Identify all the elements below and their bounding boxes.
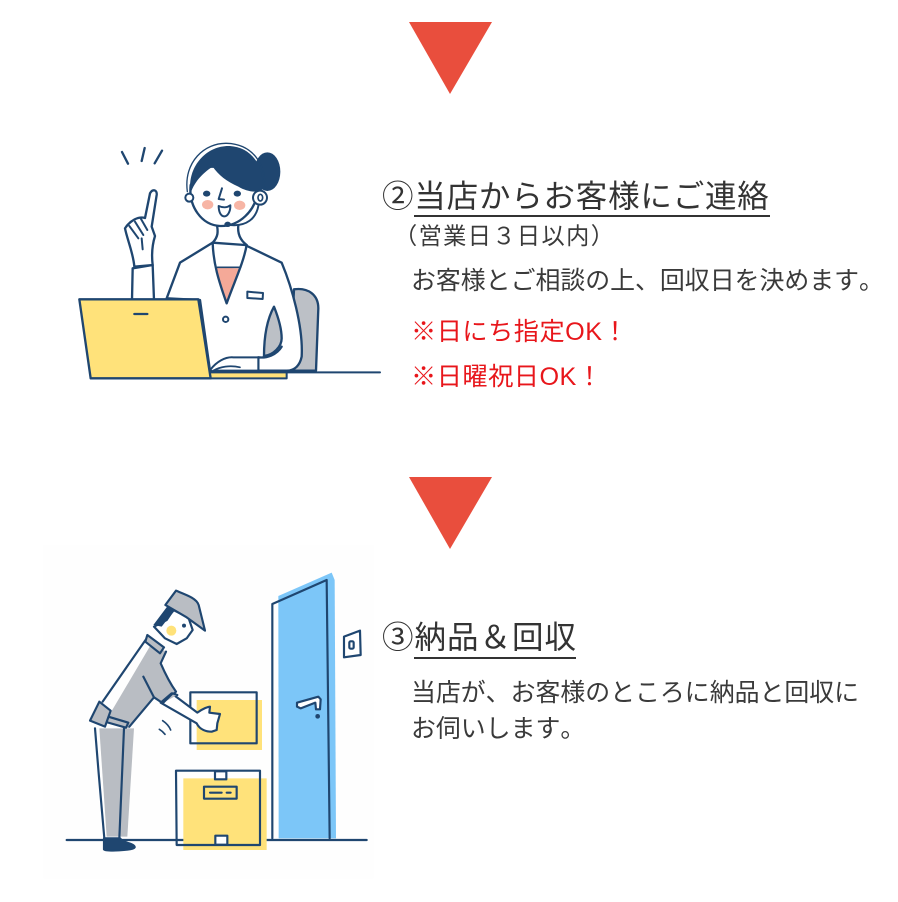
neck and inner shirt [216,267,240,303]
shoe [104,838,135,850]
shirt fill [108,643,176,728]
sleeve [132,265,154,300]
arm [161,693,220,732]
button [223,317,228,322]
text: step 2 description: お客様とご相談の上、回収日を決めます。 [411,267,884,295]
arrow: down triangle 2 [409,477,492,549]
hand on keyboard [211,357,258,371]
nose [219,188,224,200]
heading underline: step 3 [414,657,576,658]
text: step 3 description: お伺いします。 [411,715,585,743]
text: step 3 description: 当店が、お客様のところに納品と回収に [411,679,859,707]
faint backdrop [43,545,373,878]
text: step 3 description [411,679,859,743]
shirt outline [103,638,176,727]
heading underline: step 2 [414,215,770,216]
illustration: courier with boxes at door [43,545,373,878]
head [154,610,193,644]
lower box [183,778,267,850]
callout: Sundays and holidays OK: ※日曜祝日OK！ [411,363,603,391]
cheeks [202,200,213,209]
headset band [187,143,265,192]
sparkle lines [122,148,162,164]
upper box [197,700,262,750]
coat [167,243,302,371]
collar [145,635,164,653]
mic boom [230,206,258,225]
text: within 3 business days: （営業日３日以内） [394,223,615,249]
cap [165,591,205,631]
motion lines [159,721,171,734]
ear piece [253,191,267,205]
door colour [278,573,336,838]
cheek [166,626,176,636]
heading: step 3: ③納品＆回収 [382,619,577,655]
arm gap [264,307,282,356]
hand pointing [125,190,157,267]
mouth [219,205,230,216]
man trousers [99,728,134,837]
bun [254,152,280,191]
badge [247,292,263,299]
eyes [203,191,210,197]
door outline [272,580,330,838]
arrow: down triangle 1 [409,22,492,94]
face [190,167,257,226]
illustration: operator with headset at laptop [79,143,380,378]
chair [290,289,318,371]
heading: step 2: ②当店からお客様にご連絡 [382,178,770,214]
callout: date selection OK: ※日にち指定OK！ [411,318,628,346]
laptop [79,299,211,378]
hair [190,146,263,193]
ground [67,837,367,843]
keyboard [91,372,287,378]
wall switch [344,631,361,657]
door handle [297,697,321,709]
desk line [287,369,380,375]
belt and pouch [106,717,128,728]
